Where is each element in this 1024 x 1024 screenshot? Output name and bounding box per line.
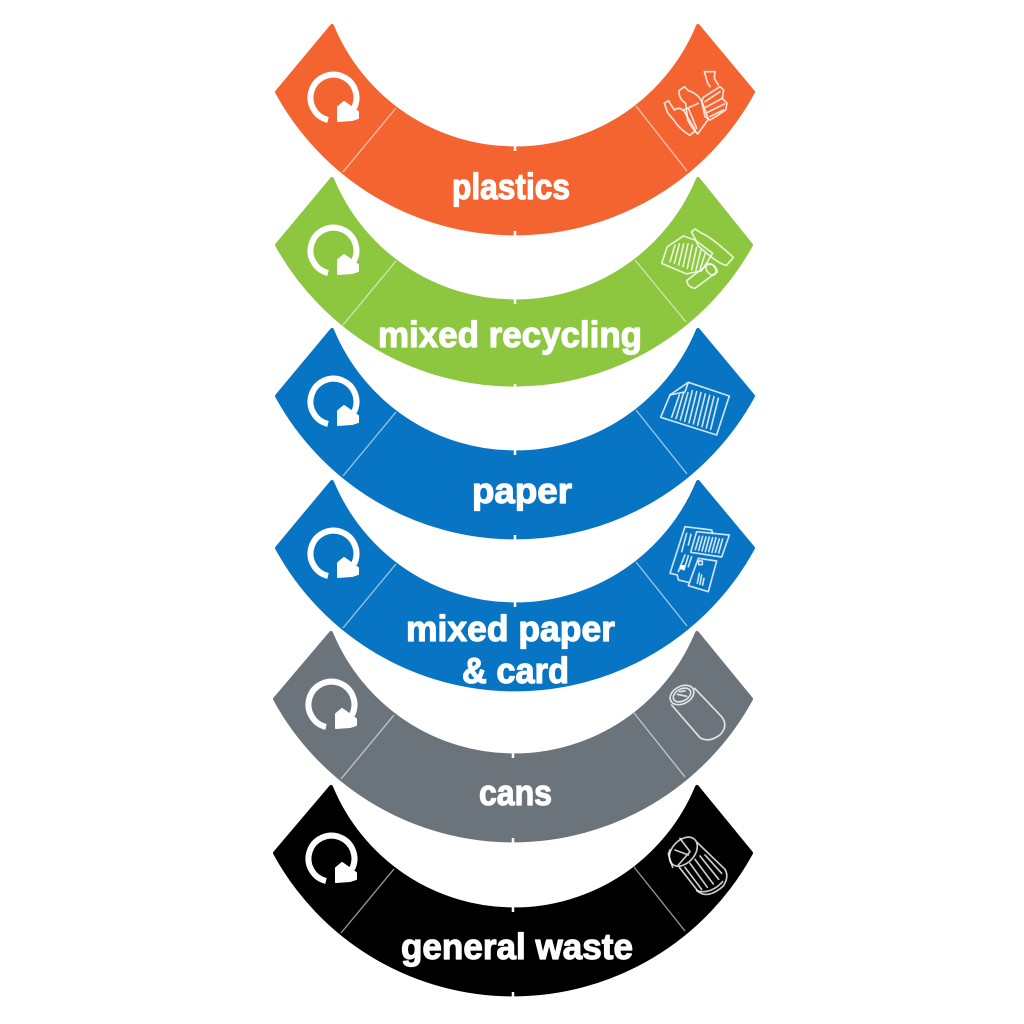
icon: recycling arrow [310, 379, 358, 425]
icon: recycling arrow [308, 682, 356, 728]
icon: drinks can [667, 681, 725, 740]
label: paper: paper [472, 470, 572, 511]
icon: recycling arrow [310, 531, 358, 577]
label: plastics: plastics [452, 166, 570, 207]
icon: plastic bottles [664, 72, 727, 135]
icon: recycling arrow [310, 228, 358, 274]
icon: recycling arrow [308, 836, 356, 882]
band: plastics [277, 26, 753, 236]
band: mixed paper and card [277, 482, 753, 691]
band: paper [277, 330, 753, 540]
label: mixed paper: mixed paper [406, 608, 615, 649]
label: cans: cans [479, 772, 552, 813]
band: general waste [275, 787, 751, 997]
label: mixed recycling: mixed recycling [378, 314, 642, 355]
icon: sheet of paper [661, 382, 729, 435]
label: and card: & card [462, 650, 569, 691]
band: mixed recycling [277, 179, 751, 389]
icon: papers and card [670, 527, 729, 592]
label: general waste: general waste [401, 926, 633, 967]
icon: waste bin [664, 832, 727, 894]
band: cans [275, 633, 751, 843]
icon: carton, bottle and can [662, 229, 733, 288]
icon: recycling arrow [310, 75, 358, 121]
